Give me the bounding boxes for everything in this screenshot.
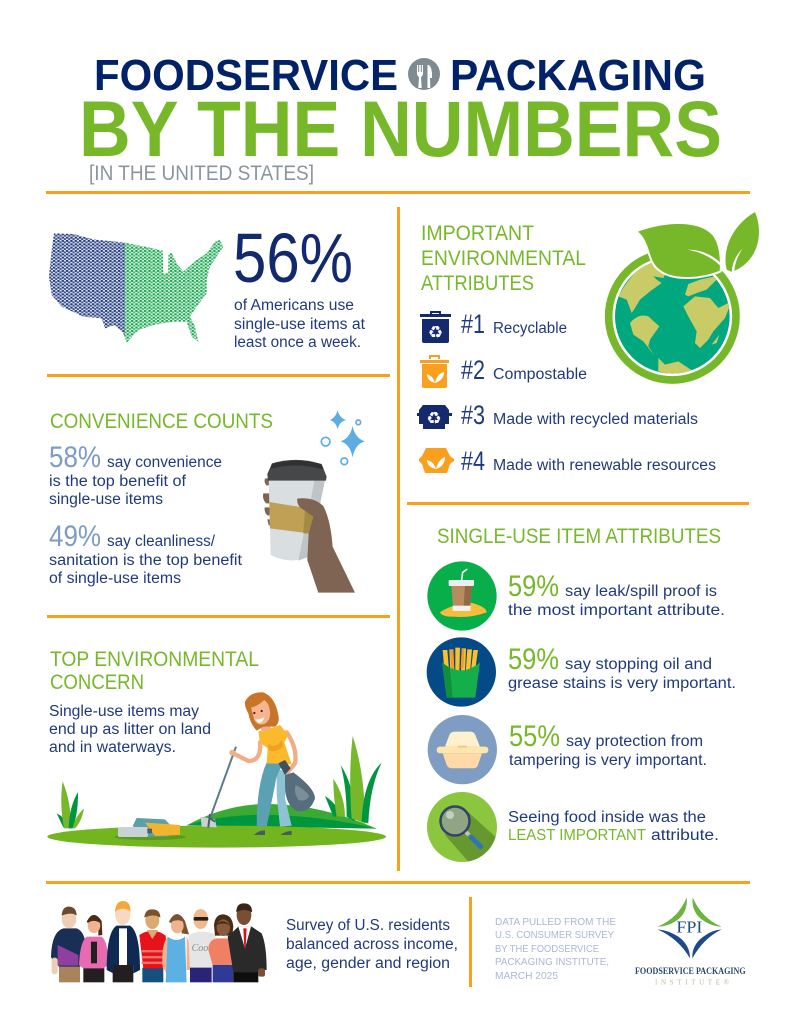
- list item: renewable resources: [419, 446, 716, 476]
- icon: fries: [427, 637, 496, 707]
- stat: 49 percent: 49%: [49, 520, 101, 553]
- row: oil and grease: say stopping oil and: [565, 656, 712, 673]
- stat: 58 percent: single-use items: [49, 491, 163, 508]
- logo: FPI: FPI: [676, 918, 702, 937]
- panel: top environmental concern: [47, 648, 386, 848]
- logo: FPI: [635, 897, 746, 987]
- source note: [495, 916, 616, 982]
- panel: top environmental concern: CONCERN: [50, 671, 144, 694]
- list item: recycled materials: #3: [461, 400, 485, 430]
- icon: dotted US map: [49, 233, 223, 343]
- litter: [133, 818, 172, 837]
- person 1: [51, 907, 87, 982]
- stat: 58 percent: 58%: [49, 441, 101, 474]
- row: leak proof: [427, 561, 725, 631]
- person 2: [79, 915, 108, 982]
- heading: TOP ENVIRONMENTAL: [50, 648, 259, 671]
- source note: BY THE FOODSERVICE: [495, 943, 599, 955]
- logo: FPI: INSTITUTE®: [655, 979, 730, 987]
- survey text: Survey of U.S. residents: [286, 917, 450, 934]
- footer: [51, 897, 746, 987]
- source note: U.S. CONSUMER SURVEY: [495, 929, 614, 941]
- panel: important environmental attributes: ENVIRONMENTAL: [421, 247, 586, 270]
- panel: important environmental attributes: ATTRIBUTES: [421, 272, 534, 295]
- description: end up as litter on land: [49, 721, 211, 738]
- row: oil and grease: [427, 637, 736, 707]
- icon: magnifying glass: [427, 792, 497, 862]
- big number: 56%: [233, 219, 353, 297]
- title: [79, 51, 722, 185]
- person 6: [188, 909, 217, 982]
- grabber: [210, 747, 236, 818]
- heading: IMPORTANT: [421, 222, 534, 245]
- description: [49, 703, 211, 756]
- logo: FPI: FOODSERVICE PACKAGING: [635, 967, 746, 977]
- row: leak proof: the most important attribute.: [508, 602, 725, 619]
- row: tampering: 55%: [509, 720, 560, 753]
- description: Single-use items may: [49, 703, 199, 720]
- row: oil and grease: grease stains is very important.: [508, 675, 736, 692]
- icon: recycled container: ♻: [426, 409, 442, 429]
- row: tampering: say protection from: [566, 733, 703, 750]
- row: seeing food: attribute.: [651, 827, 719, 844]
- row: leak proof: say leak/spill proof is: [565, 583, 717, 600]
- icon: spilled drink: [427, 561, 497, 631]
- row: leak proof: 59%: [508, 570, 559, 603]
- source note: MARCH 2025: [495, 970, 558, 982]
- icon: globe with leaves: [609, 212, 759, 380]
- icon: recycled container: [417, 405, 452, 429]
- stat: 58 percent: say convenience: [107, 454, 222, 471]
- survey text: balanced across income,: [286, 936, 458, 953]
- heading: SINGLE-USE ITEM ATTRIBUTES: [437, 525, 721, 548]
- row: oil and grease: 59%: [508, 643, 559, 676]
- icon: recycling bin: [420, 311, 451, 343]
- description: of Americans use: [234, 297, 354, 314]
- list item: recyclable: Recyclable: [493, 320, 567, 337]
- description: [234, 297, 366, 351]
- row: tampering: [428, 715, 707, 784]
- person 5: [162, 914, 191, 982]
- panel: important environmental attributes: [417, 212, 759, 476]
- icon: clamshell box: [428, 715, 497, 784]
- illustration: group of people: [51, 901, 267, 982]
- icon: coffee cup in hand: [263, 410, 365, 593]
- person 8: [228, 903, 267, 982]
- stat: 58 percent: is the top benefit of: [49, 473, 187, 490]
- source note: PACKAGING INSTITUTE,: [495, 956, 609, 968]
- panel: single-use item attributes: [427, 525, 736, 875]
- survey text: age, gender and region: [286, 955, 450, 972]
- list item: recycled materials: [417, 400, 698, 430]
- icon: recycling bin: ♻: [428, 323, 443, 343]
- list item: compostable: Compostable: [493, 366, 587, 383]
- title line: foodservice: FOODSERVICE: [94, 51, 398, 100]
- list item: compostable: [420, 355, 587, 388]
- icon: renewable container: [419, 448, 454, 473]
- title line: packaging: PACKAGING: [450, 51, 706, 100]
- panel: convenience counts: [49, 410, 365, 593]
- list item: compostable: #2: [461, 355, 485, 385]
- list item: renewable resources: Made with renewable resources: [493, 457, 716, 474]
- panel: 56 percent: [49, 233, 365, 347]
- stat: 58 percent: [49, 441, 222, 508]
- description: single-use items at: [234, 316, 366, 333]
- source note: DATA PULLED FROM THE: [495, 916, 616, 928]
- list item: recyclable: #1: [461, 309, 485, 339]
- stat: 49 percent: sanitation is the top benefit: [49, 552, 243, 569]
- heading: CONVENIENCE COUNTS: [50, 410, 273, 433]
- person 7: [208, 914, 238, 982]
- row: tampering: tampering is very important.: [509, 752, 707, 769]
- person 4: [139, 909, 168, 982]
- description: and in waterways.: [49, 739, 176, 756]
- stat: 49 percent: say cleanliness/: [107, 533, 216, 550]
- stat: 49 percent: [49, 520, 243, 587]
- list item: recycled materials: Made with recycled materials: [493, 411, 698, 428]
- list item: renewable resources: #4: [461, 446, 485, 476]
- stat: 49 percent: of single-use items: [49, 570, 181, 587]
- list item: recyclable: [420, 309, 567, 343]
- subtitle: [IN THE UNITED STATES]: [89, 162, 314, 185]
- description: least once a week.: [234, 334, 361, 351]
- person 3: [107, 901, 140, 982]
- sparkles: [330, 410, 365, 457]
- icon: compost bin: [420, 355, 449, 388]
- survey text: [286, 917, 458, 972]
- title line: by the numbers: BY THE NUMBERS: [79, 84, 722, 173]
- illustration: woman picking litter: [47, 692, 386, 848]
- row: seeing food: LEAST IMPORTANT: [508, 827, 647, 844]
- woman: [229, 692, 315, 835]
- person 6: Cool: [192, 943, 211, 954]
- icon: fork and knife: [408, 58, 440, 90]
- row: seeing food: [427, 792, 718, 862]
- row: seeing food: Seeing food inside was the: [508, 809, 706, 826]
